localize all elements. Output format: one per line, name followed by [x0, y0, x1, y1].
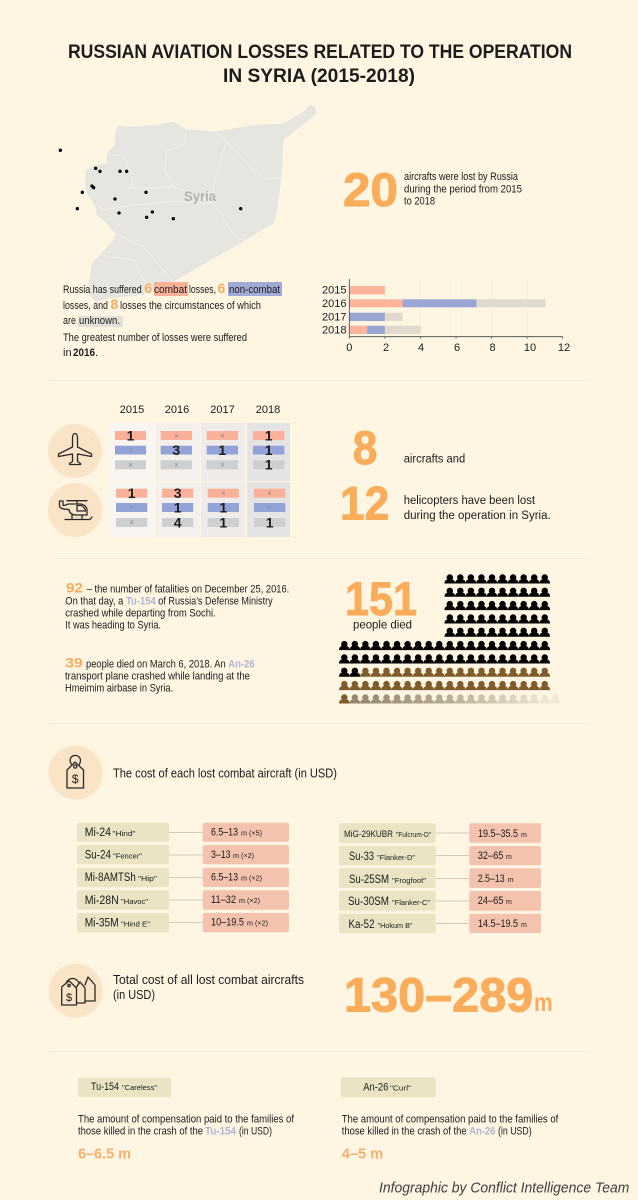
right cost table: Su-25SM [349, 874, 389, 886]
summary paragraph: losses, [189, 284, 216, 296]
right cost table: m [506, 854, 512, 861]
big number: 20 aircrafts: to 2018 [404, 195, 435, 207]
icon: price tag: $ [72, 772, 79, 786]
summary paragraph: 8 [110, 296, 118, 312]
bar chart: losses by year: 2017 [322, 312, 346, 324]
left cost table: m (×2) [241, 876, 262, 882]
aircraft losses per year: × [220, 460, 225, 470]
right cost table: "Fulcrum-D" [396, 832, 431, 839]
compensation panel: An-26: An-26 [469, 1125, 495, 1137]
summary paragraph: Russia has suffered [63, 284, 142, 296]
right cost table: m [508, 877, 514, 884]
aircraft losses per year: × [174, 460, 179, 470]
big number: total cost range: 130–289 [344, 970, 533, 1023]
icon: multiple price tags: $ [66, 992, 72, 1004]
compensation panel: An-26: 4–5 m [342, 1145, 383, 1162]
map of Syria with crash points [59, 105, 317, 302]
text: Tu-154 crash: On that day, a [65, 595, 124, 607]
icon: helicopter [48, 483, 102, 537]
left cost table: 6.5–13 [211, 826, 238, 838]
left cost table: Mi-28N [85, 895, 119, 907]
bar chart: losses by year: 2018 [322, 325, 346, 337]
aircraft losses per year: 1 [265, 428, 273, 444]
right cost table: Su-33 [349, 851, 374, 863]
left cost table: 6.5–13 [211, 872, 238, 884]
heading: total cost: (in USD) [113, 988, 155, 1002]
aircraft losses per year: × [128, 460, 133, 470]
text: Tu-154 crash: – the number of fatalities on December 25, 2016. [87, 583, 289, 595]
left cost table: Mi-35M [85, 918, 119, 930]
text: An-26 crash: 39 [65, 654, 83, 670]
right cost table: "Frogfoot" [392, 878, 427, 885]
right cost table: "Flanker-D" [377, 855, 416, 862]
left cost table: 10–19.5 [211, 916, 244, 928]
left cost table: "Hind" [112, 831, 136, 838]
right cost table [339, 823, 541, 933]
bar chart: losses by year [322, 279, 570, 354]
compensation panel: Tu-154: The amount of compensation paid to the families of [78, 1113, 295, 1125]
helicopter losses per year: 1 [266, 514, 274, 530]
right cost table: 14.5–19.5 [478, 918, 518, 930]
right cost table: 24–65 [478, 895, 503, 907]
table column backgrounds and year headers: 2018 [256, 404, 280, 416]
left cost table: 3–13 [211, 849, 230, 861]
summary paragraph: 6 [144, 280, 152, 296]
text: Tu-154 crash: of Russia's Defense Ministry [158, 595, 273, 607]
text: An-26 crash: people died on March 6, 2018. An [86, 658, 226, 670]
compensation panel: Tu-154: 6–6.5 m [78, 1145, 131, 1162]
summary paragraph: are [63, 315, 76, 327]
big numbers: 8 aircrafts and 12 helicopters [340, 421, 551, 529]
title: RUSSIAN AVIATION LOSSES RELATED TO THE OPERATION [68, 41, 572, 63]
left cost table: m (×2) [233, 853, 254, 860]
aircraft losses per year: × [174, 432, 179, 440]
left cost table: Su-24 [85, 850, 112, 862]
aircraft losses per year: × [220, 432, 225, 440]
compensation panel: An-26: (in USD) [498, 1125, 532, 1137]
right cost table: Ka-52 [348, 919, 374, 931]
big numbers: 8 aircrafts and 12 helicopters: helicopters have been lost [404, 495, 536, 507]
helicopter losses per year: 1 [219, 514, 227, 530]
big number: 20 aircrafts [343, 163, 522, 216]
summary paragraph: combat [154, 284, 187, 296]
big numbers: 8 aircrafts and 12 helicopters: aircrafts and [404, 454, 465, 466]
title: IN SYRIA (2015-2018) [223, 65, 415, 87]
heading: cost of each aircraft: The cost of each lost combat aircraft (in USD) [113, 767, 337, 781]
helicopter losses per year: 1 [128, 485, 136, 501]
summary paragraph: 6 [218, 280, 226, 296]
text: An-26 crash [65, 654, 255, 695]
left cost table: m (×2) [247, 920, 268, 928]
big number: 20 aircrafts: during the period from 2015 [404, 183, 522, 195]
text: Tu-154 crash: It was heading to Syria. [65, 619, 161, 631]
right cost table: Su-30SM [348, 896, 389, 908]
compensation panel: An-26: "Curl" [390, 1086, 412, 1093]
right cost table: m [521, 832, 527, 839]
compensation panel: Tu-154: "Careless" [122, 1085, 158, 1092]
compensation panel: An-26: those killed in the crash of the [342, 1125, 467, 1137]
right cost table: m [521, 922, 527, 929]
table column backgrounds and year headers [109, 404, 290, 537]
right cost table: MiG-29KUBR [344, 829, 393, 840]
big number: 20 aircrafts: 20 [343, 163, 398, 216]
summary paragraph: in [63, 347, 72, 359]
right cost table: 19.5–35.5 [478, 828, 518, 840]
aircraft losses per year: 1 [218, 442, 226, 458]
helicopter losses per year: 4 [174, 514, 182, 530]
bar chart: losses by year: 6 [454, 342, 460, 354]
right cost table: "Flanker-C" [392, 900, 431, 907]
left cost table: "Fencer" [113, 854, 143, 860]
heading: total cost: Total cost of all lost combat aircrafts [113, 973, 304, 987]
bar chart: losses by year: 10 [524, 342, 536, 354]
icon: multiple price tags [49, 964, 103, 1018]
compensation panel: An-26 [341, 1077, 559, 1162]
bar chart: losses by year: 8 [489, 342, 496, 354]
left cost table: m (×5) [241, 830, 262, 838]
bar chart: losses by year: 0 [346, 342, 352, 354]
summary paragraph: non-combat [229, 284, 280, 296]
left cost table: m (×2) [239, 898, 260, 905]
bar chart: losses by year: 12 [558, 342, 570, 354]
bar chart: losses by year: 4 [418, 342, 424, 354]
compensation panel: Tu-154: (in USD) [239, 1125, 272, 1137]
compensation panel: An-26: An-26 [363, 1082, 388, 1094]
summary paragraph: losses, and [63, 300, 108, 312]
big number: 151 people died: people died [353, 618, 412, 632]
right cost table: "Hokum B" [378, 923, 413, 930]
left cost table: Mi-8AMTSh [85, 872, 136, 884]
helicopter losses per year: × [267, 503, 272, 512]
compensation panel: Tu-154: Tu-154 [205, 1125, 237, 1137]
compensation panel: Tu-154 [78, 1078, 295, 1162]
helicopter losses per year: 1 [174, 500, 182, 516]
left cost table: "Hind E" [121, 922, 151, 928]
text: An-26 crash: An-26 [228, 658, 255, 670]
pictogram: 151 people [339, 574, 561, 704]
big numbers: 8 aircrafts and 12 helicopters: during the operation in Syria. [404, 510, 551, 522]
aircraft losses per year: × [128, 446, 133, 455]
heading: total cost [113, 973, 304, 1002]
aircraft losses per year: 1 [265, 456, 273, 472]
bar chart: losses by year: 2016 [322, 298, 346, 310]
icon: airplane [48, 424, 102, 478]
compensation panel: Tu-154: Tu-154 [91, 1081, 119, 1093]
table column backgrounds and year headers: 2016 [165, 404, 189, 416]
aircraft losses per year [115, 428, 284, 472]
table column backgrounds and year headers: 2015 [120, 404, 144, 416]
left cost table: Mi-24 [85, 827, 112, 839]
left cost table: "Havoc" [121, 899, 149, 906]
compensation panel: Tu-154: those killed in the crash of the [78, 1125, 203, 1137]
summary paragraph: The greatest number of losses were suffered [63, 332, 247, 344]
big number: 151 people died: 151 [345, 572, 417, 625]
right cost table: 32–65 [478, 850, 503, 862]
left cost table: "Hip" [138, 876, 158, 883]
left cost table: 11–32 [211, 894, 236, 906]
summary paragraph: unknown. [79, 315, 120, 327]
helicopter losses per year: × [221, 489, 226, 498]
big numbers: 8 aircrafts and 12 helicopters: 12 [340, 476, 389, 529]
summary paragraph: 2016 [73, 347, 95, 359]
compensation panel: An-26: The amount of compensation paid to the families of [342, 1113, 559, 1125]
big number: total cost range: m [534, 987, 553, 1017]
text: An-26 crash: transport plane crashed while landing at the [65, 671, 250, 683]
title [68, 41, 572, 87]
bar chart: losses by year: 2 [383, 342, 389, 354]
text: Tu-154 crash [65, 579, 289, 631]
text: An-26 crash: Hmeimim airbase in Syria. [65, 683, 173, 695]
helicopter losses per year [116, 485, 285, 530]
right cost table: m [506, 899, 512, 906]
summary paragraph [63, 280, 282, 359]
aircraft losses per year: 1 [265, 442, 273, 458]
text: Tu-154 crash: 92 [66, 579, 83, 595]
table column backgrounds and year headers: 2017 [210, 404, 235, 416]
helicopter losses per year: 3 [174, 485, 182, 501]
right cost table: 2.5–13 [478, 873, 505, 885]
aircraft losses per year: 3 [172, 442, 180, 458]
helicopter losses per year: × [129, 503, 134, 512]
big numbers: 8 aircrafts and 12 helicopters: 8 [353, 421, 377, 474]
big number: 20 aircrafts: aircrafts were lost by Russia [404, 171, 519, 183]
aircraft losses per year: 1 [127, 428, 135, 444]
map of Syria with crash points: Syria [184, 188, 216, 204]
helicopter losses per year: 1 [219, 500, 227, 516]
summary paragraph: losses the circumstances of which [120, 300, 261, 312]
left cost table [77, 823, 289, 932]
bar chart: losses by year: 2015 [322, 284, 346, 296]
helicopter losses per year: × [129, 518, 134, 527]
helicopter losses per year: × [267, 489, 272, 498]
text: Tu-154 crash: Tu-154 [126, 595, 156, 607]
summary paragraph: . [95, 347, 98, 359]
text: Tu-154 crash: crashed while departing from Sochi. [65, 607, 216, 619]
icon: price tag [49, 746, 103, 800]
